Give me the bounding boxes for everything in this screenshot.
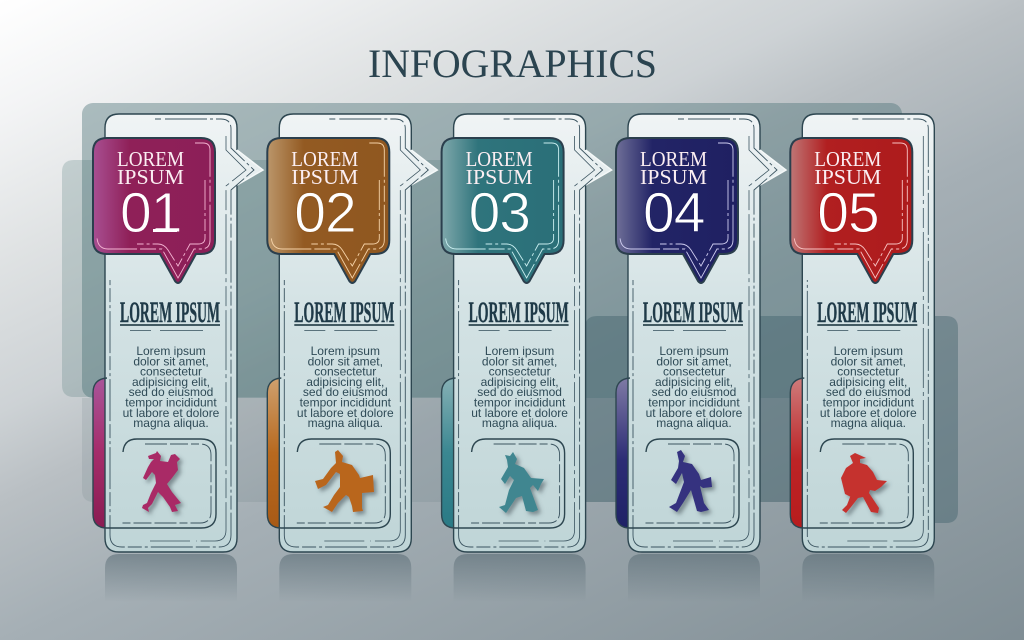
panel: column 04 [616,114,786,602]
body text: sed do eiusmod [652,385,736,399]
body text: magna aliqua. [656,416,732,430]
speech bubble badge 04: 04 [643,181,705,245]
icon: walking figure with coat [499,452,544,513]
speech bubble badge 01: LOREM [117,147,184,171]
panel: column 03 [442,114,612,602]
body text: ut labore et dolore [820,406,917,420]
body text: sed do eiusmod [129,385,213,399]
body text: magna aliqua. [482,416,557,430]
speech bubble badge 03 [442,138,564,283]
speech bubble badge 02: LOREM [291,147,359,171]
body text: tempor incididunt [823,396,915,410]
body text: tempor incididunt [125,396,217,410]
body text: consectetur [489,365,551,379]
speech bubble badge 05: LOREM [814,147,882,171]
speech bubble badge 03: IPSUM [466,165,533,189]
body text: magna aliqua. [831,416,906,430]
panel: column 04: LOREM IPSUM [643,296,743,329]
card outlines [790,114,934,552]
speech bubble badge 02: 02 [294,181,356,245]
panel: column 02: LOREM IPSUM [294,296,394,329]
card body [454,114,612,552]
backdrop panel: left band [62,160,585,397]
title: INFOGRAPHICS [368,41,657,86]
speech bubble badge 03: LOREM [466,147,533,171]
backdrop panel: lower band [82,398,810,502]
speech bubble badge 04: LOREM [640,147,707,171]
body text: sed do eiusmod [477,385,562,399]
body text: ut labore et dolore [123,406,220,420]
reflection [105,554,237,602]
speech bubble badge 05: 05 [817,181,879,245]
card outlines [442,114,612,552]
backdrop panel: top band [82,103,902,398]
body text: magna aliqua. [133,416,209,430]
body text: consectetur [314,365,376,379]
body text: consectetur [663,365,725,379]
speech bubble badge 04 [616,138,738,283]
reflection [279,554,411,602]
body text: dolor sit amet, [308,354,383,368]
colour tab [790,378,807,528]
card outlines [93,114,263,552]
icon: walking figure with briefcase [669,450,712,512]
body text: consectetur [140,365,202,379]
colour tab [93,378,110,528]
reflection [802,554,934,602]
colour tab [442,378,459,528]
panel: column 01: LOREM IPSUM [120,296,220,329]
body text: tempor incididunt [474,396,566,410]
body text: adipisicing elit, [481,375,559,389]
card body [628,114,786,552]
icon: walking figure with flower [142,451,181,512]
backdrop panel: right band [585,316,958,523]
panel: column 01 [93,114,263,602]
speech bubble badge 01: IPSUM [117,165,184,189]
body text: tempor incididunt [300,396,392,410]
card body [279,114,437,552]
panel: column 05 [790,114,934,602]
icon: walking figure with purse [841,453,887,513]
body text: dolor sit amet, [482,354,557,368]
body text: consectetur [837,365,899,379]
icon: walking figure with cases [315,450,374,512]
speech bubble badge 01: 01 [120,181,181,245]
body text: Lorem ipsum [834,344,903,358]
body text: dolor sit amet, [133,354,209,368]
card body [105,114,263,552]
body text: sed do eiusmod [303,385,388,399]
body text: adipisicing elit, [655,375,733,389]
speech bubble badge 05 [790,138,912,283]
speech bubble badge 05: IPSUM [814,165,882,189]
reflection [628,554,760,602]
body text: dolor sit amet, [831,354,906,368]
speech bubble badge 04: IPSUM [640,165,707,189]
body text: tempor incididunt [648,396,740,410]
speech bubble badge 03: 03 [469,181,530,245]
speech bubble badge 01 [93,138,215,283]
body text: Lorem ipsum [311,344,380,358]
body text: adipisicing elit, [306,375,384,389]
body text: adipisicing elit, [132,375,210,389]
body text: sed do eiusmod [826,385,911,399]
body text: ut labore et dolore [471,406,568,420]
card outlines [616,114,786,552]
panel: column 02 [267,114,437,602]
body text: ut labore et dolore [646,406,743,420]
panel: column 03: LOREM IPSUM [469,296,569,329]
speech bubble badge 02 [267,138,389,283]
body text: magna aliqua. [308,416,383,430]
body text: adipisicing elit, [829,375,907,389]
card outlines [267,114,437,552]
body text: dolor sit amet, [656,354,732,368]
colour tab [616,378,633,528]
reflection [454,554,586,602]
speech bubble badge 02: IPSUM [291,165,359,189]
body text: ut labore et dolore [297,406,394,420]
card body [802,114,934,552]
body text: Lorem ipsum [136,344,206,358]
colour tab [267,378,284,528]
body text: Lorem ipsum [659,344,729,358]
body text: Lorem ipsum [485,344,554,358]
